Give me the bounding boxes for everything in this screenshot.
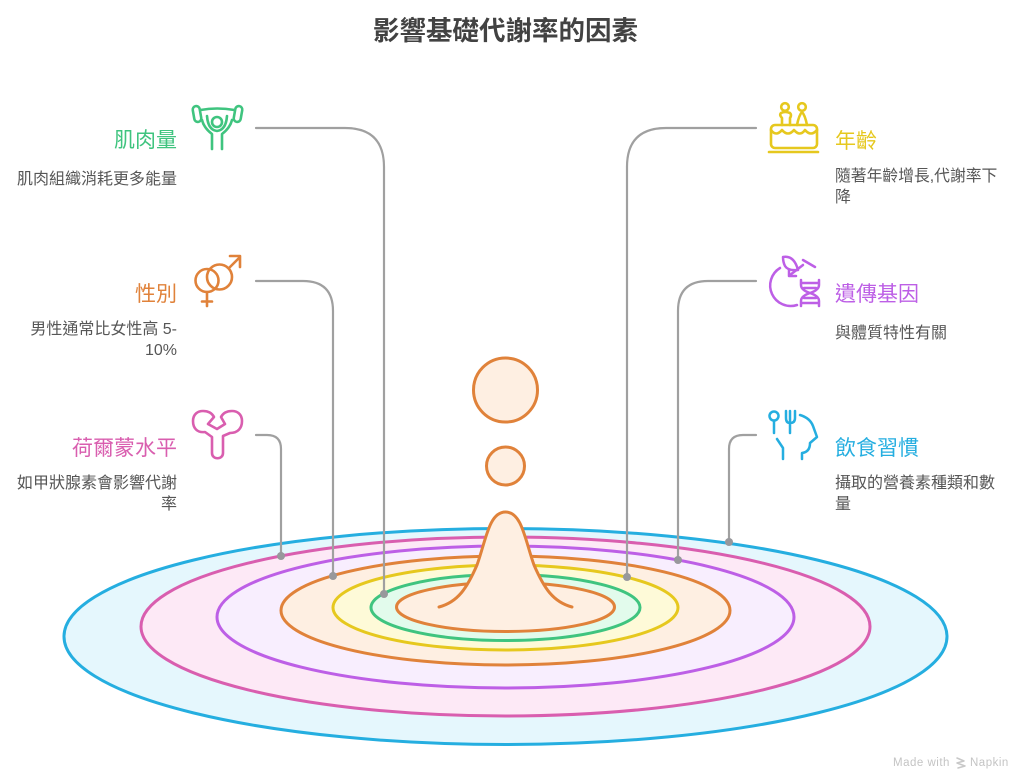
text block: muscle mass: 肌肉量 [114,129,177,152]
text block: diet: 攝取的營養素種類和數 [835,475,995,492]
text block: hormones [17,437,177,513]
ring: core [396,582,614,632]
droplet peak [439,512,572,607]
text block: age: 年齡 [835,130,877,153]
text block: genetics: 遺傳基因 [835,283,919,306]
text block: gender [30,283,177,359]
text block: diet: 量 [835,496,851,513]
text block: hormones: 如甲狀腺素會影響代謝 [17,475,177,492]
connector: age [623,128,756,581]
connector: hormones [256,435,285,560]
text block: gender: 10% [145,342,177,359]
text block: gender: 男性通常比女性高 5- [30,321,177,338]
icon: head with cutlery [770,411,817,459]
text block: muscle mass: 肌肉組織消耗更多能量 [17,171,177,188]
connector: gender [256,281,337,580]
ring: muscle mass [371,574,640,640]
text block: muscle mass [17,129,177,188]
text block: age: 降 [835,189,851,206]
text block: diet: 飲食習慣 [835,437,919,460]
ring: hormones [141,537,870,716]
connector: diet [725,435,756,546]
icon: gender symbols [196,256,240,306]
droplet: large circle [474,358,538,422]
watermark: napkin: Napkin [970,757,1009,769]
ring: genetics [217,546,794,688]
ring: diet [64,528,947,744]
text block: diet [835,437,995,513]
text block: age: 隨著年齡增長,代謝率下 [835,168,997,185]
icon: wedding cake [769,103,818,152]
icon: napkin logo [957,758,965,768]
droplet: small circle [486,447,524,485]
connector: genetics [674,281,756,564]
ring: age [333,565,678,650]
watermark: made with: Made with [893,757,950,769]
text block: genetics [835,283,947,342]
text block: hormones: 率 [161,496,177,513]
text block: genetics: 與體質特性有關 [835,325,947,342]
icon: kidneys and ureter [193,411,242,458]
ring: gender [281,556,730,665]
connector: muscle mass [256,128,388,598]
icon: apple and DNA [770,257,819,306]
text block: gender: 性別 [135,283,177,306]
title: 影響基礎代謝率的因素 [373,16,638,46]
text block: age [835,130,997,206]
icon: weightlifter [192,106,243,149]
text block: hormones: 荷爾蒙水平 [72,437,177,460]
